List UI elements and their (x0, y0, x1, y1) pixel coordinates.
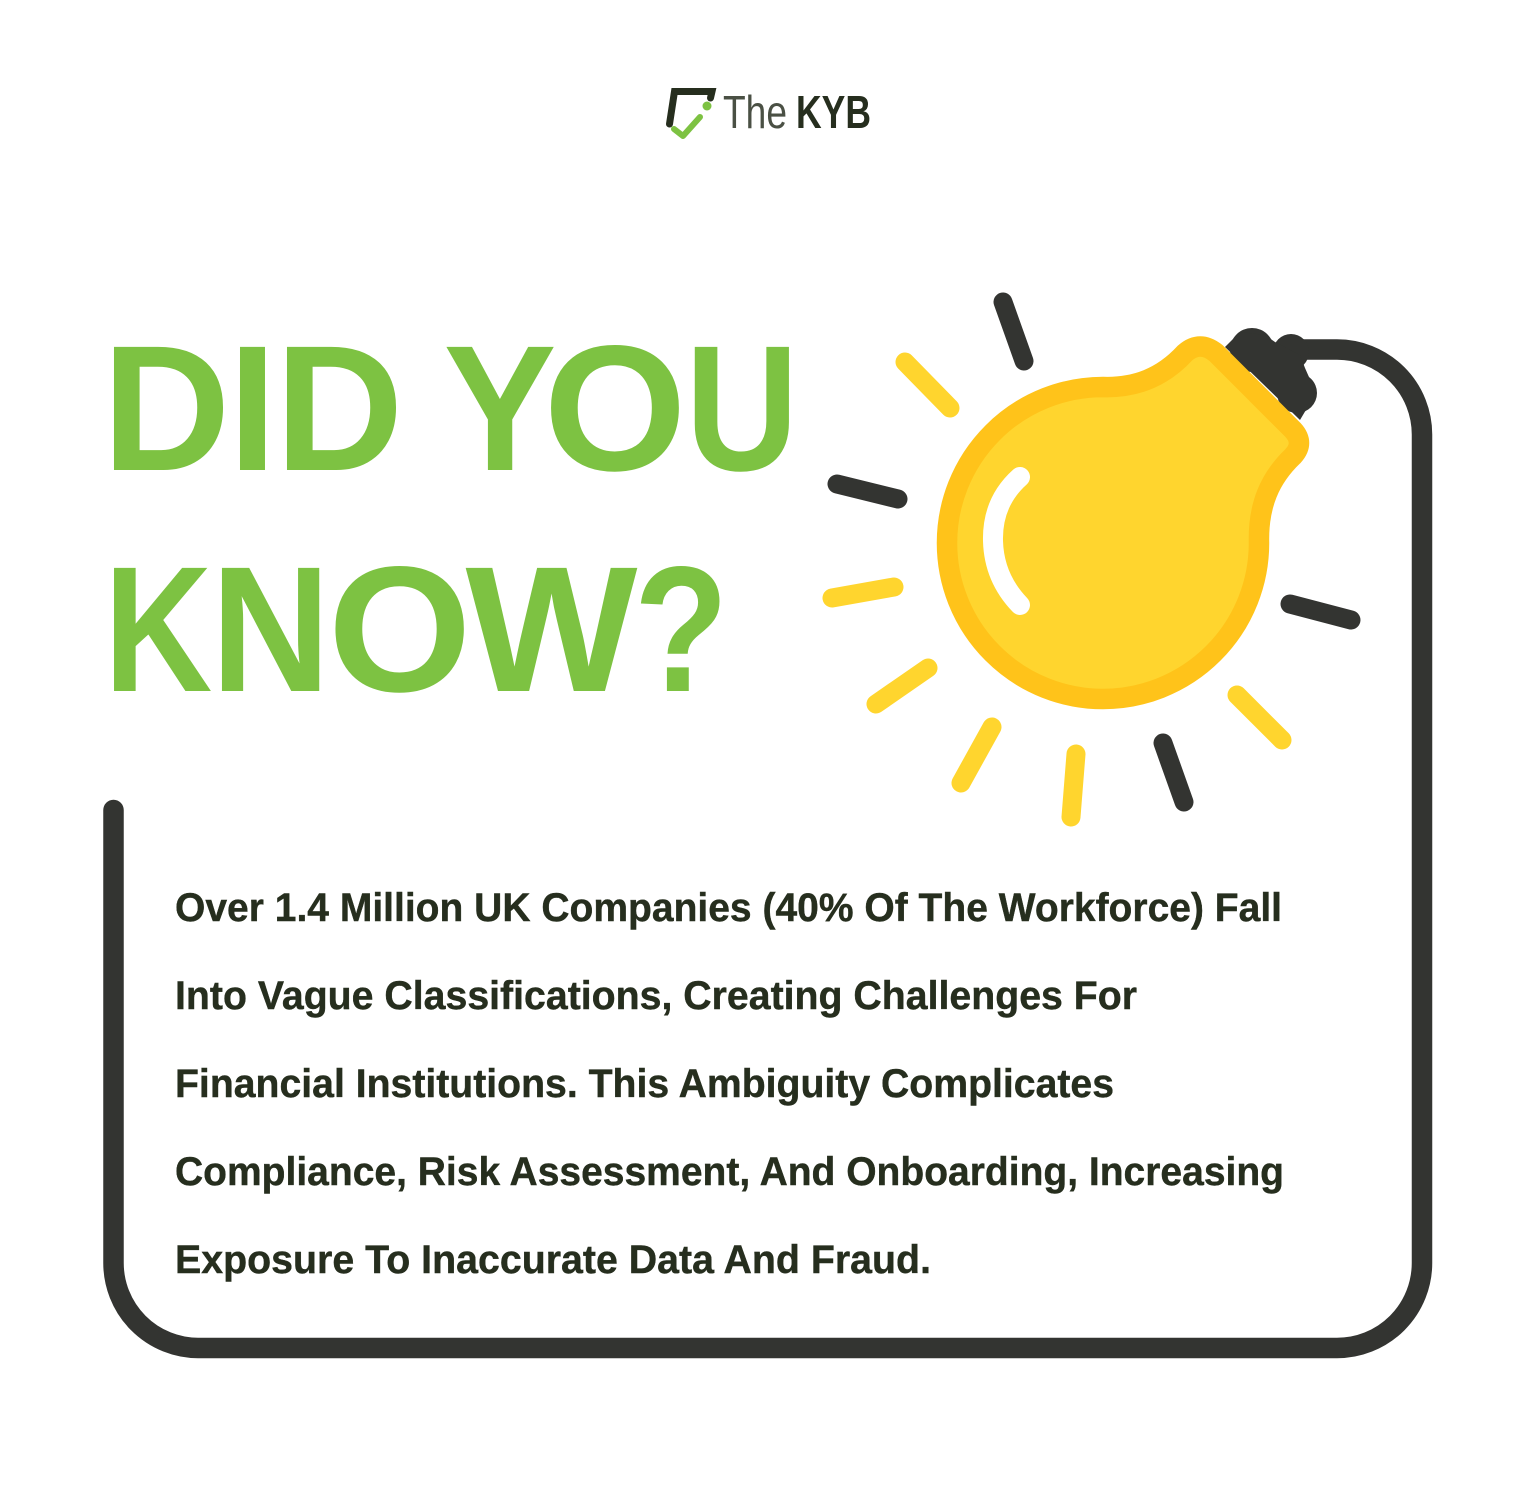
light rays: yellow (832, 362, 1282, 817)
bulb plug (1225, 328, 1317, 420)
heading: did you know: K (104, 529, 212, 729)
icon: light bulb (947, 328, 1317, 699)
heading: did you know: D (275, 308, 404, 508)
icon: shield with check (670, 92, 712, 136)
heading: did you know: I (228, 308, 277, 508)
logo wordmark: KYB (796, 86, 871, 138)
body text: Over 1.4 Million UK Companies (40% Of The Workforce) Fall (175, 886, 1282, 930)
heading: did you know: U (685, 308, 798, 508)
body text: Compliance, Risk Assessment, And Onboarding, Increasing (175, 1150, 1284, 1194)
body text (175, 886, 1284, 1282)
panel border: cord frame (114, 350, 1422, 1348)
light rays: dark (837, 302, 1351, 802)
heading: did you know: W (466, 529, 638, 729)
heading: did you know (102, 308, 799, 729)
body text: Into Vague Classifications, Creating Challenges For (175, 974, 1137, 1018)
heading: did you know: ? (634, 529, 728, 729)
bulb highlight (993, 477, 1020, 605)
body text: Exposure To Inaccurate Data And Fraud. (175, 1238, 931, 1282)
logo wordmark: The (723, 86, 787, 138)
logo: The KYB (670, 86, 871, 138)
heading: did you know: O (544, 308, 687, 508)
heading: did you know: O (328, 529, 472, 729)
bulb glass (947, 346, 1299, 699)
heading: did you know: D (102, 308, 230, 508)
heading: did you know: N (211, 529, 330, 729)
heading: did you know: Y (444, 308, 556, 508)
body text: Financial Institutions. This Ambiguity Complicates (175, 1062, 1114, 1106)
